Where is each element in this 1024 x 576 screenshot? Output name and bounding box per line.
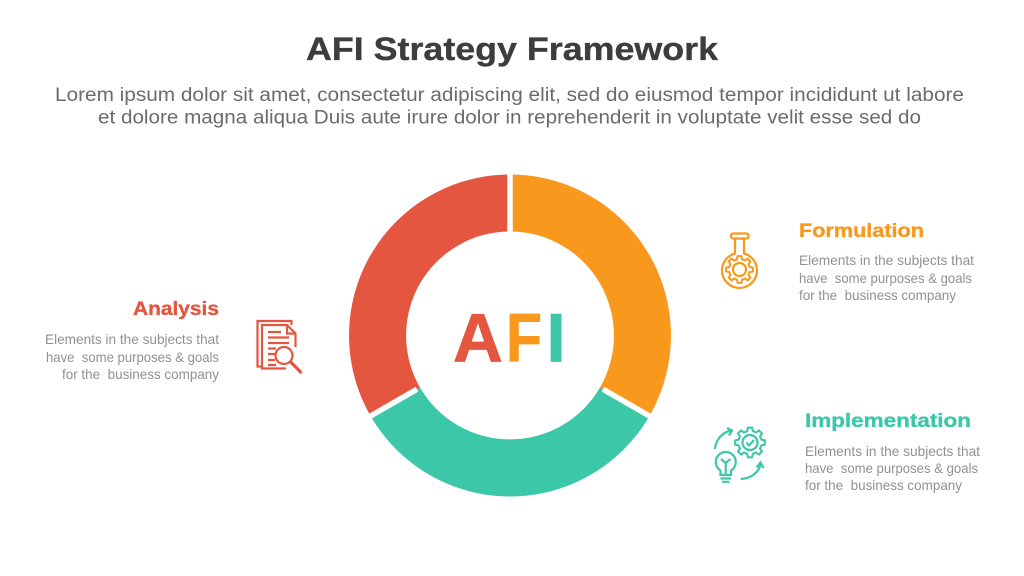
heading: implementation: Implementation [805,411,971,432]
center label: AFI: A [453,300,503,376]
center label: AFI [453,300,566,376]
segment: formulation [510,174,671,416]
panel: formulation [722,221,974,303]
text: formulation description: have some purposes & goals [799,270,972,286]
text: implementation description [805,443,980,493]
subtitle text block: Lorem ipsum dolor sit amet, consectetur adipiscing elit, sed do eiusmod tempor incididunt ut labore [55,85,964,106]
text: analysis description: Elements in the subjects that [45,331,219,347]
icon: document with magnifier [258,321,302,373]
center label: AFI: F [506,300,542,376]
text: formulation description: Elements in the subjects that [799,252,974,268]
heading: formulation: Formulation [799,221,924,242]
text: analysis description: for the business company [62,366,219,382]
text: formulation description [799,252,974,303]
icon: gear, bulb and cycle arrows [715,428,765,482]
title: AFI Strategy Framework [306,31,718,67]
text: implementation description: Elements in the subjects that [805,443,980,459]
panel: implementation [715,411,980,493]
text: implementation description: for the business company [805,477,962,493]
icon: flask with gear [722,234,757,288]
subtitle text block [55,85,964,128]
donut chart [349,170,671,496]
segment: implementation [371,388,649,496]
heading: analysis: Analysis [133,299,219,320]
text: analysis description [45,331,219,382]
segment: analysis [349,174,510,416]
text: formulation description: for the business company [799,287,956,303]
text: implementation description: have some purposes & goals [805,460,978,476]
subtitle text block: et dolore magna aliqua Duis aute irure dolor in reprehenderit in voluptate velit esse sed do [98,108,921,128]
center label: AFI: I [546,300,566,376]
panel: analysis [45,299,302,382]
text: analysis description: have some purposes & goals [46,349,219,365]
